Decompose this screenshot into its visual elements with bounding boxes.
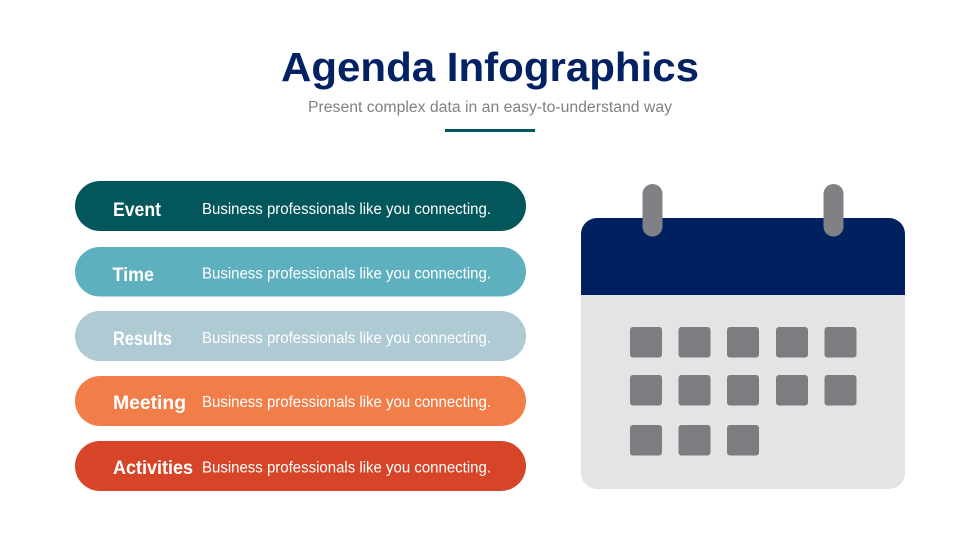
row: Event: Business professionals like you connecting. [202, 201, 491, 218]
calendar header band [581, 218, 905, 295]
binder rings [642, 184, 844, 236]
header [281, 44, 699, 132]
date grid [630, 327, 856, 456]
title: Agenda Infographics [281, 44, 699, 90]
row: Time: Business professionals like you connecting. [202, 266, 491, 282]
calendar page [581, 295, 905, 489]
icon: calendar [581, 184, 905, 489]
row: Activities: Activities [113, 458, 193, 479]
row: Activities [75, 441, 526, 491]
title underline [445, 129, 535, 132]
row: Results: Business professionals like you connecting. [202, 330, 491, 347]
row: Time: Time [112, 265, 154, 286]
row: Results [75, 311, 526, 361]
row: Results: Results [113, 329, 172, 350]
row: Event: Event [113, 200, 162, 221]
agenda list [75, 181, 526, 491]
row: Meeting [75, 376, 526, 426]
row: Meeting: Meeting [113, 393, 186, 414]
subtitle: Present complex data in an easy-to-understand way [308, 99, 672, 116]
row: Activities: Business professionals like you connecting. [202, 460, 491, 476]
row: Time [75, 247, 526, 296]
row: Meeting: Business professionals like you connecting. [202, 394, 491, 411]
row: Event [75, 181, 526, 231]
